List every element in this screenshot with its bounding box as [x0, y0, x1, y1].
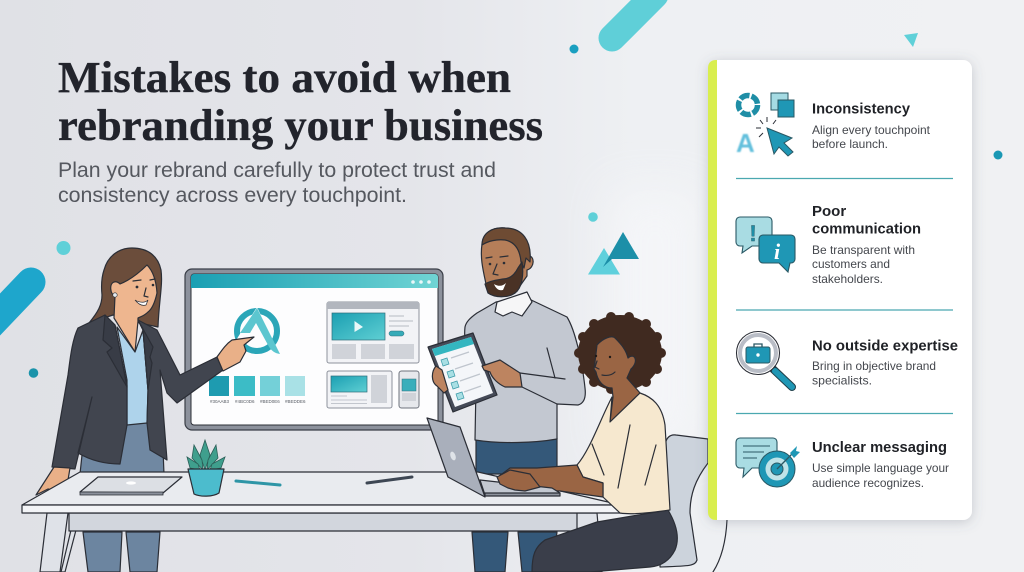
unclear messaging text: Unclear messaging: [812, 439, 947, 456]
typing hands: [497, 470, 540, 491]
inconsistency text: Align every touchpoint: [812, 123, 931, 137]
tablet layout mockup: [327, 371, 392, 408]
title: Mistakes to avoid when: [58, 53, 511, 102]
card background: [708, 60, 972, 520]
item: inconsistency: [736, 93, 931, 158]
resting hand: [36, 467, 70, 495]
poor communication text: Poor: [812, 203, 846, 220]
dot right: [994, 150, 1002, 160]
presenter man: [428, 228, 585, 572]
colour swatches: #BED0E6: [260, 399, 280, 404]
blazer right panel and arm: [138, 320, 223, 460]
light dot centre: [588, 212, 598, 222]
light dot left: [56, 241, 70, 255]
icon: shapes and cursor: A: [736, 128, 755, 158]
desk: [22, 440, 621, 572]
dark dot left: [29, 368, 38, 378]
pens: [236, 481, 280, 485]
colour swatches: #30AAB3: [210, 399, 230, 404]
poor communication text: [812, 203, 921, 286]
blue dot top: [570, 44, 578, 54]
legs: [83, 532, 160, 572]
hair: [89, 248, 162, 327]
inconsistency text: Inconsistency: [812, 100, 911, 118]
pointing hand: [217, 337, 254, 371]
cream sweater: [577, 393, 670, 514]
title: rebranding your business: [58, 101, 543, 150]
colour swatches: [209, 376, 306, 404]
item: no outside expertise: [736, 332, 958, 388]
blazer left panel: [52, 315, 127, 469]
seated woman: [427, 312, 677, 572]
head: [481, 228, 533, 296]
pot plant: [187, 440, 225, 496]
tablet: [428, 333, 497, 412]
curly hair: [574, 312, 666, 394]
item: unclear messaging: [736, 438, 949, 490]
man's hands: [482, 360, 522, 387]
icon: speech bubbles: !: [749, 221, 757, 246]
face and neck: [594, 337, 640, 422]
monitor header bar: [191, 274, 438, 288]
icon: speech bubbles: [736, 217, 795, 272]
teal pill top: [612, 0, 655, 38]
neck and face: [111, 265, 157, 352]
office chair: [660, 435, 708, 567]
poor communication text: Be transparent with: [812, 243, 915, 257]
title: [58, 53, 543, 150]
poor communication text: customers and: [812, 257, 890, 271]
trousers: [476, 438, 557, 474]
poor communication text: stakeholders.: [812, 272, 883, 286]
arms: [498, 465, 603, 497]
no outside expertise text: No outside expertise: [812, 338, 958, 354]
skirt: [80, 420, 164, 474]
colour swatches: #BEDDE6: [285, 399, 306, 404]
small triangle top right: [904, 33, 918, 47]
phone mockup: [399, 371, 419, 408]
beard: [485, 262, 523, 297]
hair: [482, 228, 530, 268]
colour swatches: #4BC0D6: [235, 399, 255, 404]
brand logo: [233, 307, 280, 355]
unclear messaging text: audience recognizes.: [812, 476, 924, 490]
sweater: [465, 298, 585, 443]
panel: mistakes list: [708, 60, 972, 520]
poor communication text: communication: [812, 220, 921, 238]
legs: [472, 532, 557, 572]
icon: speech bubbles: i: [774, 239, 781, 264]
overlapping triangles: [588, 232, 639, 274]
lime accent bar: [708, 60, 717, 520]
icon: magnifier with briefcase: [736, 332, 792, 387]
trousers: [532, 510, 677, 572]
unclear messaging text: Use simple language your: [812, 461, 949, 475]
closed laptop: [80, 477, 182, 495]
desk legs: [40, 513, 68, 572]
desk apron: [69, 513, 577, 531]
inconsistency text: [812, 100, 931, 151]
inconsistency text: before launch.: [812, 137, 888, 151]
blue pill left: [0, 282, 31, 325]
desk top: [22, 472, 621, 505]
no outside expertise text: specialists.: [812, 374, 872, 388]
subtitle: Plan your rebrand carefully to protect trust and: [58, 159, 496, 182]
icon: shapes and cursor: [736, 93, 794, 158]
icon: bubble and target: [736, 438, 800, 487]
lapels: [103, 315, 153, 390]
blouse: [117, 327, 148, 425]
decorative shapes: [0, 0, 1002, 378]
presentation monitor: [185, 269, 443, 430]
no outside expertise text: [812, 338, 958, 388]
no outside expertise text: Bring in objective brand: [812, 359, 936, 373]
item: poor communication: [736, 203, 921, 286]
subtitle: consistency across every touchpoint.: [58, 184, 407, 207]
web page mockup: [327, 302, 419, 363]
unclear messaging text: [812, 439, 949, 490]
collar: [495, 292, 532, 316]
laptop: [427, 418, 560, 497]
presenter woman: [36, 248, 254, 572]
subtitle: [58, 159, 496, 207]
